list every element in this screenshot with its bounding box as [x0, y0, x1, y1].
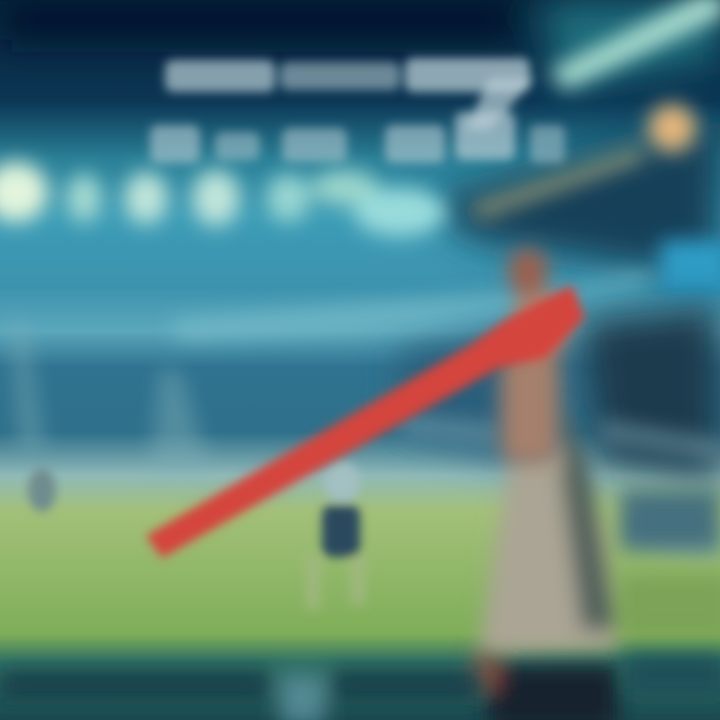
player centre	[305, 462, 366, 610]
floodlights row	[0, 162, 446, 236]
foreground figure: dark trousers	[470, 655, 618, 720]
stand highlights	[400, 415, 720, 560]
orange glow light	[470, 104, 696, 220]
bottom barrier	[0, 655, 720, 720]
distant player left	[28, 468, 56, 512]
right stands dark	[400, 305, 720, 480]
pitch right patch and stands edge	[620, 490, 720, 635]
foreground figure: coat	[478, 400, 618, 655]
floodlight pylons, left	[10, 320, 210, 470]
headline: illegible blurred title	[150, 58, 565, 163]
foreground figure: raised arm and head	[500, 248, 565, 465]
horizon glow band	[170, 270, 650, 340]
roof light beam	[550, 0, 720, 90]
upper right stadium roof	[0, 0, 720, 280]
blue scoreboard, right	[660, 240, 720, 295]
red arrow	[146, 285, 585, 558]
